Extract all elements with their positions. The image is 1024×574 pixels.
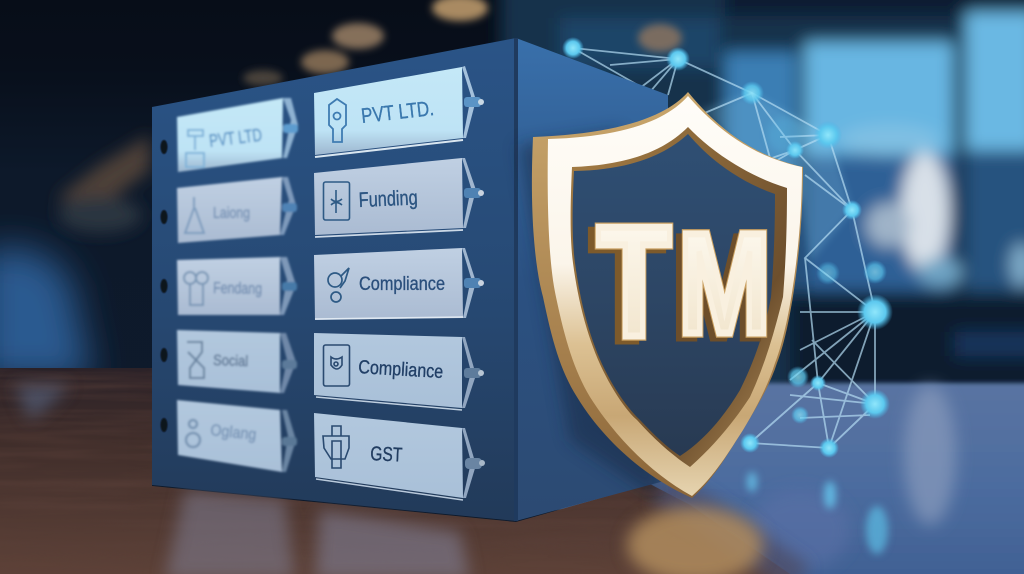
table: wood to steel blend [660,490,800,574]
label: PVT LTD.: PVT LTD. [360,97,435,128]
TM letters: M [672,207,765,368]
label: Oglang: Oglang [210,422,257,444]
table: right surface [520,383,1024,574]
label: Fendang [177,257,297,315]
right column labels [314,66,485,500]
label: GST [314,413,485,500]
table: wood surface [0,368,800,574]
shield outer rim depth [532,92,803,498]
binder: box front face [152,38,518,521]
label: Compliance bottom [314,333,484,410]
label: PVT LTD small: PVT LTD [208,125,263,151]
binder: box side face [516,38,668,521]
label: Oglang [177,400,297,472]
label: Funding: Funding [358,186,418,212]
label: Laiong: Laiong [213,205,250,222]
TM letters [590,194,771,374]
TM letters: T [597,194,671,370]
label: PVT LTD. [314,66,484,157]
label: Social [177,330,297,393]
TM letters: M [678,203,771,364]
label: Laiong [177,177,297,243]
label: Compliance top [314,248,484,320]
TM letters: M [678,203,771,364]
shield inner depth [571,127,787,467]
binder holes [160,140,168,432]
network nodes [562,37,893,458]
shield inner panel [573,134,775,456]
left column labels [177,98,298,472]
label: Social: Social [213,352,248,370]
label: PVT LTD small [177,98,298,172]
shield shadow on box [518,130,660,500]
label: GST: GST [370,443,403,467]
reflections on table [15,385,763,574]
shield [518,92,803,500]
label: Compliance bottom: Compliance [358,357,444,383]
network: glowing node mesh [573,48,875,448]
node reflections on table [747,472,888,554]
label: Compliance top: Compliance [359,274,445,295]
TM letters: T [597,194,671,370]
label: Funding [314,158,484,237]
TM letters: T [590,198,664,374]
label: Fendang: Fendang [213,280,262,298]
shield gold face [548,96,802,496]
